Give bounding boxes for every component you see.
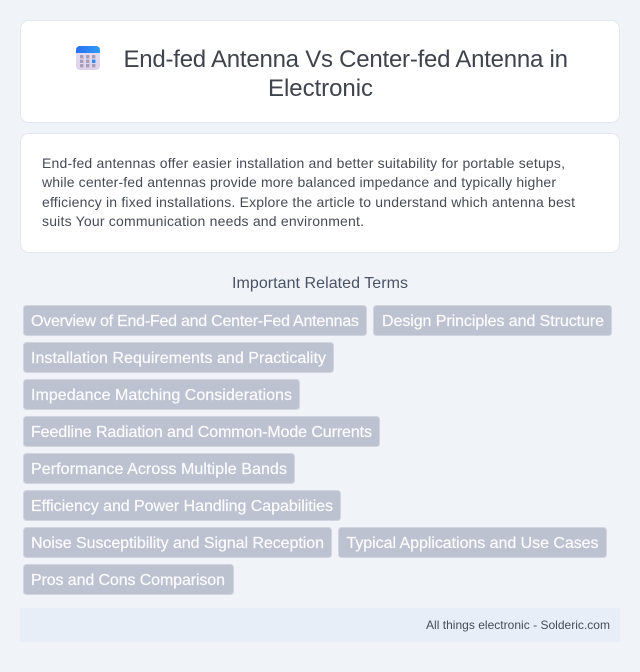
footer: All things electronic - Solderic.com xyxy=(426,618,610,632)
title xyxy=(124,46,568,102)
tag: noise: Noise Susceptibility and Signal Reception xyxy=(31,535,324,552)
tag: efficiency: Efficiency and Power Handling Capabilities xyxy=(31,498,333,515)
text block: summary: while center-fed antennas provide more balanced impedance and typically higher xyxy=(41,174,556,190)
tag: design xyxy=(374,306,612,336)
tag: performance xyxy=(24,454,294,484)
tag: pros and cons: Pros and Cons Comparison xyxy=(31,572,225,589)
tag: noise xyxy=(24,528,332,558)
tag: feedline: Feedline Radiation and Common-Mode Currents xyxy=(31,424,372,441)
panel: title header xyxy=(20,20,620,122)
title: Electronic xyxy=(268,75,373,102)
text block: summary: suits Your communication needs and environment. xyxy=(42,213,364,229)
tag: design: Design Principles and Structure xyxy=(382,313,604,330)
tag: installation xyxy=(24,342,334,372)
text block: summary xyxy=(41,155,575,229)
tag: overview xyxy=(24,306,366,336)
tag: efficiency xyxy=(24,490,340,520)
footer xyxy=(20,608,620,642)
tag: performance: Performance Across Multiple Bands xyxy=(31,461,287,478)
tag: overview: Overview of End-Fed and Center-Fed Antennas xyxy=(31,313,359,330)
text block: summary: efficiency in fixed installations. Explore the article to understand which antenna best xyxy=(42,194,575,210)
icon: calendar xyxy=(76,46,100,70)
title: End-fed Antenna Vs Center-fed Antenna in xyxy=(124,46,568,73)
tag: applications: Typical Applications and Use Cases xyxy=(346,535,598,552)
panel: summary paragraph xyxy=(20,134,620,252)
tag: applications xyxy=(338,528,606,558)
tag: impedance xyxy=(24,380,300,410)
heading: related terms: Important Related Terms xyxy=(232,275,408,292)
tag: impedance: Impedance Matching Considerations xyxy=(31,387,292,404)
tag: feedline xyxy=(24,416,380,446)
panel: term tags xyxy=(24,306,612,594)
tag: pros and cons xyxy=(24,564,234,594)
tag: installation: Installation Requirements and Practicality xyxy=(31,350,326,367)
text block: summary: End-fed antennas offer easier installation and better suitability for portable setups, xyxy=(42,155,565,171)
